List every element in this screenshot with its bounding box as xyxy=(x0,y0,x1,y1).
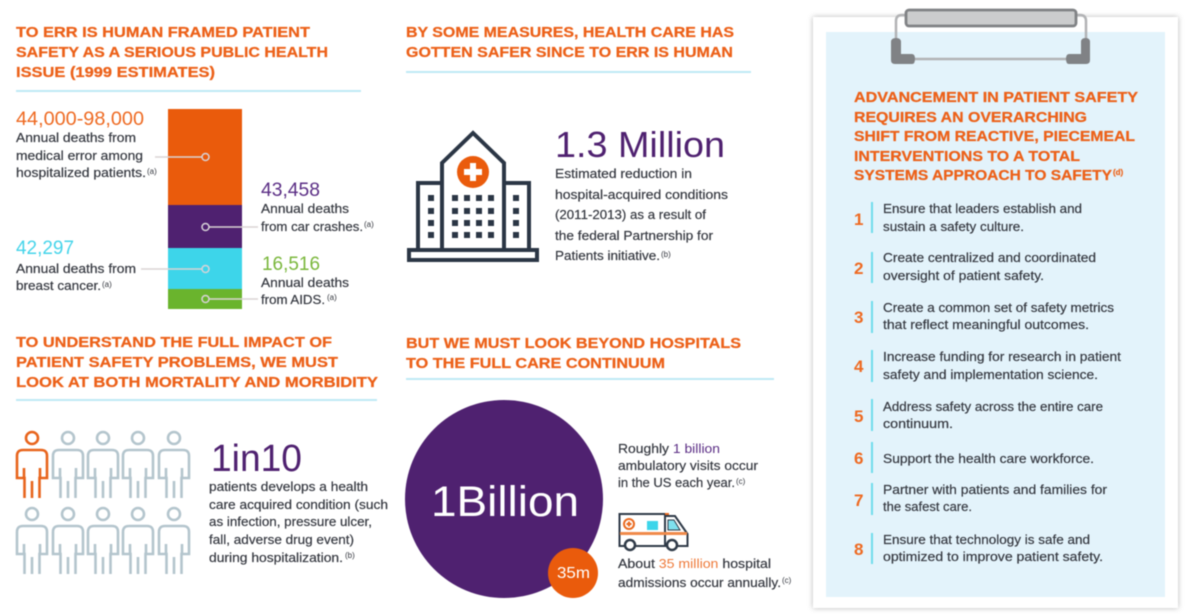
heading: advancement in patient safety: SHIFT FROM REACTIVE, PIECEMEAL xyxy=(854,129,1135,145)
text: hospital admissions: admissions occur annually. xyxy=(618,576,781,590)
stat: medical error: Annual deaths from xyxy=(16,131,136,145)
stat: car crashes: 43,458 xyxy=(261,180,320,201)
heading: advancement in patient safety: (d) xyxy=(1113,168,1124,177)
stat: AIDS: 16,516 xyxy=(262,254,320,275)
stacked bar chart xyxy=(141,109,258,309)
heading: full impact: PATIENT SAFETY PROBLEMS, WE MUST xyxy=(16,355,338,371)
list: eight recommendations xyxy=(854,202,1122,564)
heading: advancement in patient safety: SYSTEMS APPROACH TO SAFETY xyxy=(854,168,1112,184)
panel: health care safer xyxy=(406,25,751,263)
item 3: that reflect meaningful outcomes. xyxy=(883,318,1089,332)
heading: beyond hospitals: BUT WE MUST LOOK BEYOND HOSPITALS xyxy=(406,336,741,352)
text: ambulatory visits: in the US each year. xyxy=(618,476,735,490)
heading: gotten safer: BY SOME MEASURES, HEALTH CARE HAS xyxy=(406,25,734,41)
item 1: sustain a safety culture. xyxy=(883,220,1024,234)
bubble: 35m xyxy=(548,548,598,598)
item 7 xyxy=(854,483,1107,515)
stat: 1.3 million: Patients initiative. xyxy=(555,249,660,263)
heading: full impact xyxy=(16,335,378,391)
stat: 1.3 million: 1.3 Million xyxy=(555,124,725,165)
heading: to err is human xyxy=(16,25,328,81)
item 2: 2 xyxy=(854,259,863,278)
heading: advancement in patient safety: REQUIRES AN OVERARCHING xyxy=(854,110,1087,126)
item 7: the safest care. xyxy=(883,500,972,514)
stat: 1 in 10: care acquired condition (such xyxy=(209,498,388,512)
heading: advancement in patient safety: INTERVENTIONS TO A TOTAL xyxy=(854,149,1080,165)
item 2: Create centralized and coordinated xyxy=(883,251,1096,265)
item 4 xyxy=(854,350,1122,382)
item 8 xyxy=(854,533,1103,564)
item 4: 4 xyxy=(854,357,864,376)
item 7: Partner with patients and families for xyxy=(883,483,1107,497)
clipboard sheet xyxy=(813,17,1178,608)
stat: 1 in 10: 1in10 xyxy=(211,438,302,480)
stat: 1.3 million: hospital-acquired conditions xyxy=(555,188,728,202)
item 3: Create a common set of safety metrics xyxy=(883,301,1114,315)
stat: car crashes xyxy=(261,180,374,234)
stat: 1.3 million: the federal Partnership for xyxy=(555,229,713,243)
item 8: Ensure that technology is safe and xyxy=(883,533,1090,547)
stat: car crashes: from car crashes. xyxy=(261,220,363,234)
bubble: 1 billion: 1Billion xyxy=(431,478,579,526)
item 5: Address safety across the entire care xyxy=(883,400,1103,414)
stat: car crashes: Annual deaths xyxy=(261,202,349,216)
stat: 1 in 10: fall, adverse drug event) xyxy=(209,533,354,547)
icon: clipboard clip xyxy=(891,10,1090,64)
panel: 1999 estimates xyxy=(16,25,374,309)
panel: clipboard xyxy=(813,10,1178,608)
item 1: Ensure that leaders establish and xyxy=(883,202,1082,216)
stat: breast cancer xyxy=(16,238,136,293)
stat: 1.3 million: Estimated reduction in xyxy=(555,167,692,181)
icon: hospital xyxy=(409,133,537,260)
stat: breast cancer: 42,297 xyxy=(16,238,74,259)
heading: full impact: TO UNDERSTAND THE FULL IMPACT OF xyxy=(16,335,332,351)
stat: 1 in 10: (b) xyxy=(345,551,355,560)
item 6 xyxy=(854,442,1094,473)
stat: medical error: hospitalized patients. xyxy=(16,166,146,180)
clipboard inner panel xyxy=(826,32,1165,597)
panel: mortality and morbidity xyxy=(16,335,388,574)
stat: 1.3 million: (2011-2013) as a result of xyxy=(555,208,707,222)
heading: to err is human: ISSUE (1999 ESTIMATES) xyxy=(16,65,215,81)
heading: to err is human: SAFETY AS A SERIOUS PUBLIC HEALTH xyxy=(16,45,328,61)
stat: 1.3 million: (b) xyxy=(661,250,671,259)
text: hospital admissions: (c) xyxy=(782,576,792,585)
bubble: 1 billion xyxy=(405,400,603,598)
stat: AIDS: from AIDS. xyxy=(261,293,325,307)
stat: breast cancer: Annual deaths from xyxy=(16,262,136,276)
text: ambulatory visits xyxy=(618,442,758,490)
text: ambulatory visits: Roughly 1 billion xyxy=(618,442,720,456)
text: ambulatory visits: ambulatory visits occur xyxy=(618,459,758,473)
item 6: Support the health care workforce. xyxy=(883,452,1094,466)
item 3: 3 xyxy=(854,308,863,327)
item 3 xyxy=(854,301,1114,333)
stat: 1 in 10: patients develops a health xyxy=(209,480,368,494)
item 5: continuum. xyxy=(883,417,953,431)
stat: 1 in 10: during hospitalization. xyxy=(209,551,343,565)
item 2: oversight of patient safety. xyxy=(883,269,1044,283)
heading: gotten safer xyxy=(406,25,734,61)
item 1 xyxy=(854,202,1082,234)
icon: ambulance xyxy=(620,513,688,550)
heading: advancement in patient safety xyxy=(854,90,1138,184)
item 8: optimized to improve patient safety. xyxy=(883,550,1103,564)
stat: 1 in 10 xyxy=(209,438,388,565)
heading: to err is human: TO ERR IS HUMAN FRAMED PATIENT xyxy=(16,25,310,41)
item 7: 7 xyxy=(854,491,863,510)
item 6: 6 xyxy=(854,449,863,468)
stat: medical error: medical error among xyxy=(16,149,143,163)
item 8: 8 xyxy=(854,540,863,559)
stat: medical error xyxy=(16,109,157,180)
text: hospital admissions: About 35 million hospital xyxy=(618,557,771,571)
stat: breast cancer: breast cancer. xyxy=(16,279,101,293)
stat: medical error: (a) xyxy=(147,167,157,176)
stat: AIDS: Annual deaths xyxy=(261,276,349,290)
heading: full impact: LOOK AT BOTH MORTALITY AND MORBIDITY xyxy=(16,375,378,391)
stat: medical error: 44,000-98,000 xyxy=(16,109,144,130)
item 4: safety and implementation science. xyxy=(883,368,1098,382)
text: hospital admissions xyxy=(618,557,792,590)
heading: advancement in patient safety: ADVANCEMENT IN PATIENT SAFETY xyxy=(854,90,1138,106)
text: ambulatory visits: (c) xyxy=(736,477,746,486)
item 1: 1 xyxy=(854,210,863,229)
icon: ten people, one highlighted xyxy=(17,432,189,574)
item 2 xyxy=(854,251,1096,283)
heading: beyond hospitals xyxy=(406,336,741,372)
stat: AIDS xyxy=(261,254,349,307)
heading: beyond hospitals: TO THE FULL CARE CONTINUUM xyxy=(406,356,665,372)
stat: car crashes: (a) xyxy=(364,220,374,229)
item 5: 5 xyxy=(854,407,863,426)
heading: gotten safer: GOTTEN SAFER SINCE TO ERR IS HUMAN xyxy=(406,45,733,61)
item 4: Increase funding for research in patient xyxy=(883,350,1122,364)
stat: 1.3 million xyxy=(555,124,728,263)
stat: AIDS: (a) xyxy=(327,293,337,302)
item 5 xyxy=(854,399,1103,431)
bubble: 35m: 35m xyxy=(557,565,590,582)
stat: breast cancer: (a) xyxy=(102,280,112,289)
stat: 1 in 10: as infection, pressure ulcer, xyxy=(209,515,372,529)
panel: full care continuum xyxy=(405,336,792,598)
